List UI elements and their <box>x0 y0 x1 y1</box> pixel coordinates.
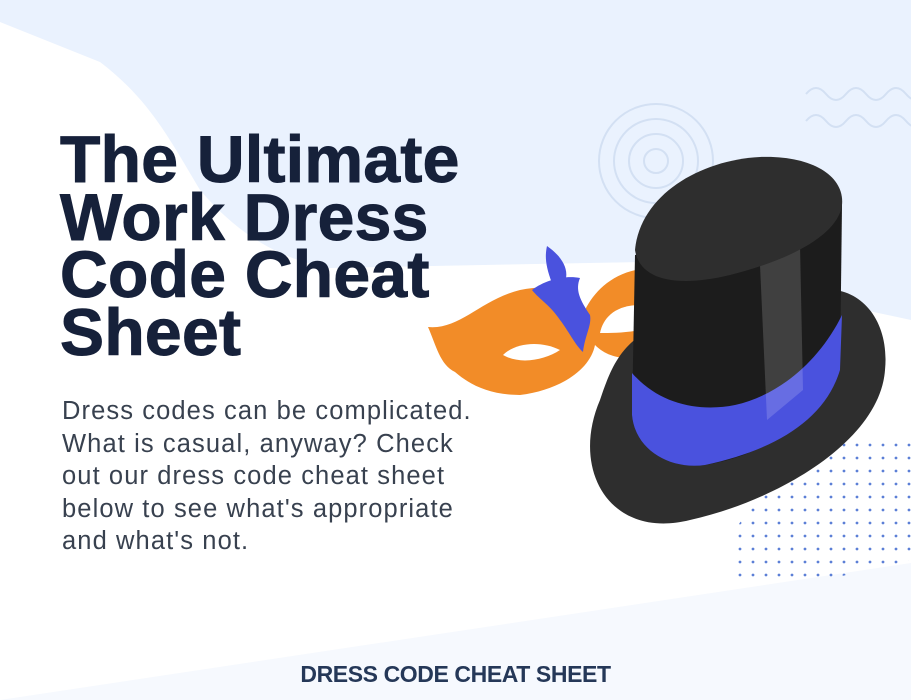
icon: top hat <box>590 156 886 524</box>
intro text: Dress codes can be complicated. <box>62 397 472 425</box>
title: The Ultimate <box>60 122 460 196</box>
title: Code Cheat <box>60 237 430 311</box>
intro text: What is casual, anyway? Check <box>62 430 454 458</box>
title <box>59 122 460 368</box>
icon: mask <box>428 246 635 395</box>
dots pattern <box>738 444 910 576</box>
title: Sheet <box>60 294 241 368</box>
footer heading: DRESS CODE CHEAT SHEET <box>300 661 611 687</box>
intro text: below to see what's appropriate <box>62 494 454 522</box>
title: Work Dress <box>60 180 429 254</box>
intro text <box>62 397 472 555</box>
intro text: out our dress code cheat sheet <box>62 462 445 490</box>
intro text: and what's not. <box>62 527 249 555</box>
